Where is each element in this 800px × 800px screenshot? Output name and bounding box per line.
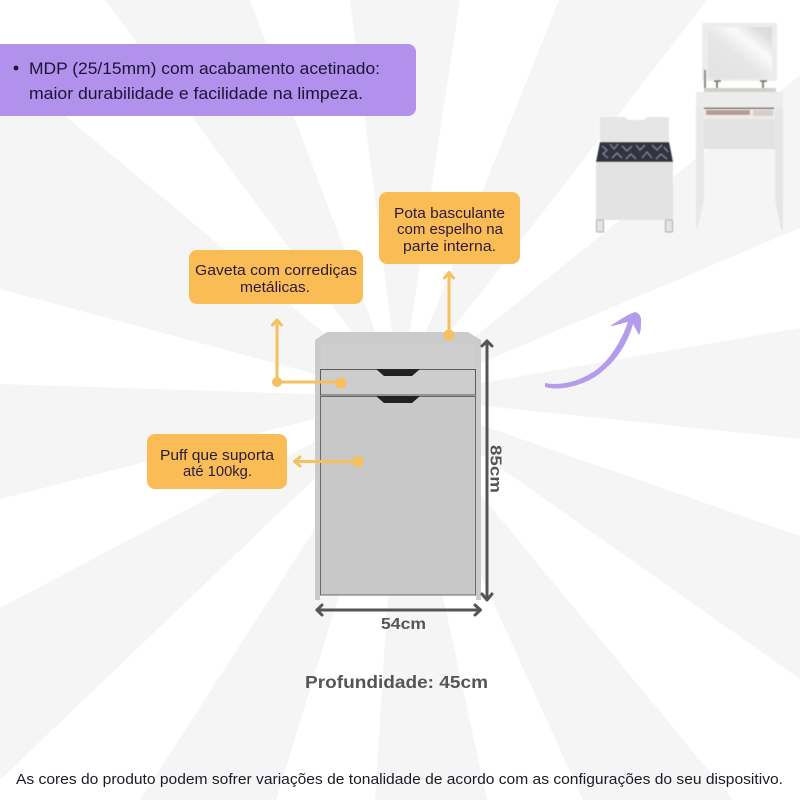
callout: weight capacity: até 100kg. bbox=[183, 464, 252, 480]
callout: mirror flap: com espelho na bbox=[397, 222, 504, 238]
callout: drawer slides: metálicas. bbox=[240, 280, 310, 296]
arrow: drawer slides bbox=[272, 320, 346, 388]
footer disclaimer: As cores do produto podem sofrer variações de tonalidade de acordo com as configurações do seu dispositivo. bbox=[16, 771, 783, 788]
callout: weight capacity: Puff que suporta bbox=[160, 448, 275, 464]
curved arrow to product photos bbox=[545, 312, 641, 388]
panel: material description bbox=[0, 44, 416, 116]
dimension label: width: 54cm bbox=[381, 616, 426, 633]
arrow: weight capacity bbox=[294, 456, 364, 467]
callout: weight capacity bbox=[147, 434, 287, 489]
dimension arrow: width bbox=[317, 605, 480, 615]
product photo: vanity with mirror bbox=[696, 23, 783, 230]
callout: mirror flap: Pota basculante bbox=[394, 206, 505, 222]
dimension label: height: 85cm bbox=[486, 445, 504, 493]
dimension label: depth: Profundidade: 45cm bbox=[305, 672, 488, 692]
callout: mirror flap bbox=[379, 192, 520, 264]
panel: material description: MDP (25/15mm) com acabamento acetinado: bbox=[29, 59, 380, 78]
product photo: puff bbox=[596, 117, 673, 232]
cabinet illustration bbox=[315, 332, 481, 600]
panel: material description: maior durabilidade e facilidade na limpeza. bbox=[29, 84, 363, 103]
callout: drawer slides bbox=[189, 250, 363, 304]
arrow: mirror flap bbox=[444, 272, 454, 340]
dimension arrow: height bbox=[482, 341, 492, 600]
callout: mirror flap: parte interna. bbox=[403, 239, 496, 255]
callout: drawer slides: Gaveta com corrediças bbox=[195, 263, 357, 279]
